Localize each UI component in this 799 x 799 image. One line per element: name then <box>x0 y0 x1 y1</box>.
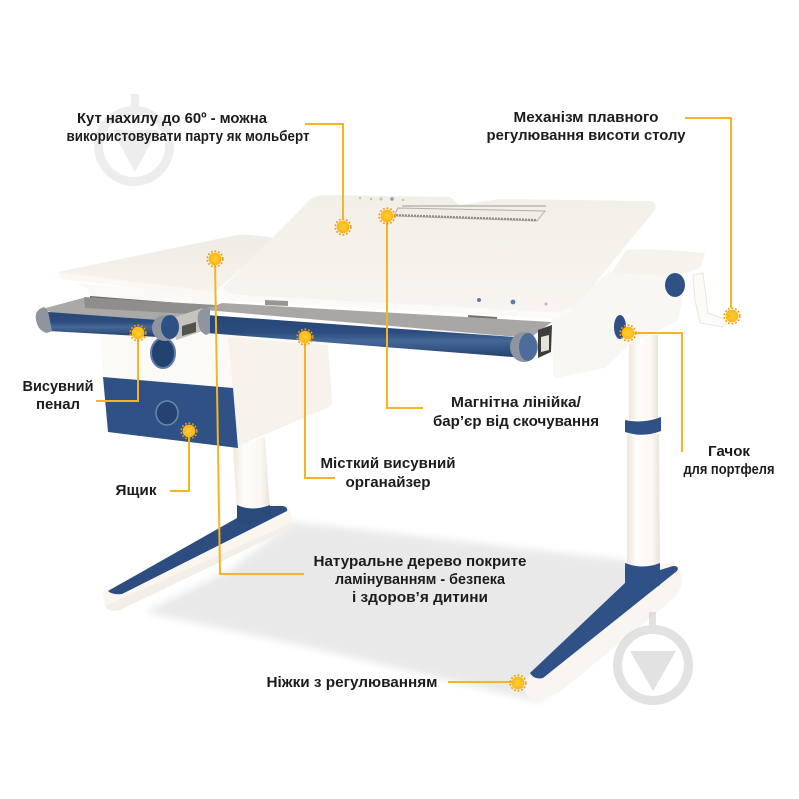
label: organizer <box>320 455 456 491</box>
label: magnetic ruler <box>433 394 599 430</box>
organizer tray and handle <box>198 303 552 362</box>
right bracket housing <box>552 272 682 378</box>
floor shadow <box>145 522 640 702</box>
label: tilt angle: використовувати парту як мольберт <box>66 128 310 145</box>
label: natural wood: ламінуванням - безпека <box>335 571 506 588</box>
label: hook: для портфеля <box>684 461 774 478</box>
magnetic ruler <box>394 208 545 221</box>
label: hook: Гачок <box>708 443 750 460</box>
label: natural wood: Натуральне дерево покрите <box>314 553 526 570</box>
label: organizer: Місткий висувний <box>320 455 456 472</box>
left leg column <box>233 437 270 512</box>
label: pencil case: пенал <box>36 396 80 413</box>
hook <box>614 315 626 339</box>
label: height mechanism <box>486 109 686 144</box>
label: height mechanism: Механізм плавного <box>514 109 658 126</box>
label: tilt angle: Кут нахилу до 60º - можна <box>77 110 268 127</box>
label: natural wood: і здоров’я дитини <box>352 589 488 606</box>
pencil case knob <box>151 338 175 368</box>
label: natural wood <box>314 553 526 606</box>
label: drawer: Ящик <box>116 482 157 499</box>
label: hook <box>684 443 774 478</box>
tilted tabletop <box>222 195 656 318</box>
label: tilt angle <box>66 110 310 145</box>
desk illustration <box>36 195 728 700</box>
label: pencil case <box>22 378 94 413</box>
label: magnetic ruler: Магнітна лінійка/ <box>451 394 582 411</box>
callout markers <box>130 208 740 691</box>
label: magnetic ruler: бар’єр від скочування <box>433 413 599 430</box>
label: height mechanism: регулювання висоти столу <box>486 127 686 144</box>
watermark: bottom right <box>613 612 693 705</box>
drawer <box>103 377 238 448</box>
callout leader lines <box>96 118 731 682</box>
label: organizer: органайзер <box>346 474 430 491</box>
organizer box <box>100 330 332 447</box>
label: adjustable legs: Ніжки з регулюванням <box>266 674 438 691</box>
tabletop icons <box>359 197 404 201</box>
left foot <box>103 505 293 611</box>
crank knob <box>665 273 685 297</box>
hinges <box>265 300 288 306</box>
crank handle <box>693 273 728 327</box>
height collar <box>625 417 661 435</box>
left drawer tray <box>36 297 215 341</box>
right leg column <box>629 335 658 420</box>
watermark: top left <box>94 94 174 186</box>
left side panel <box>58 235 275 310</box>
right foot <box>524 563 682 700</box>
label: pencil case: Висувний <box>22 378 94 395</box>
right side panel <box>610 249 705 277</box>
